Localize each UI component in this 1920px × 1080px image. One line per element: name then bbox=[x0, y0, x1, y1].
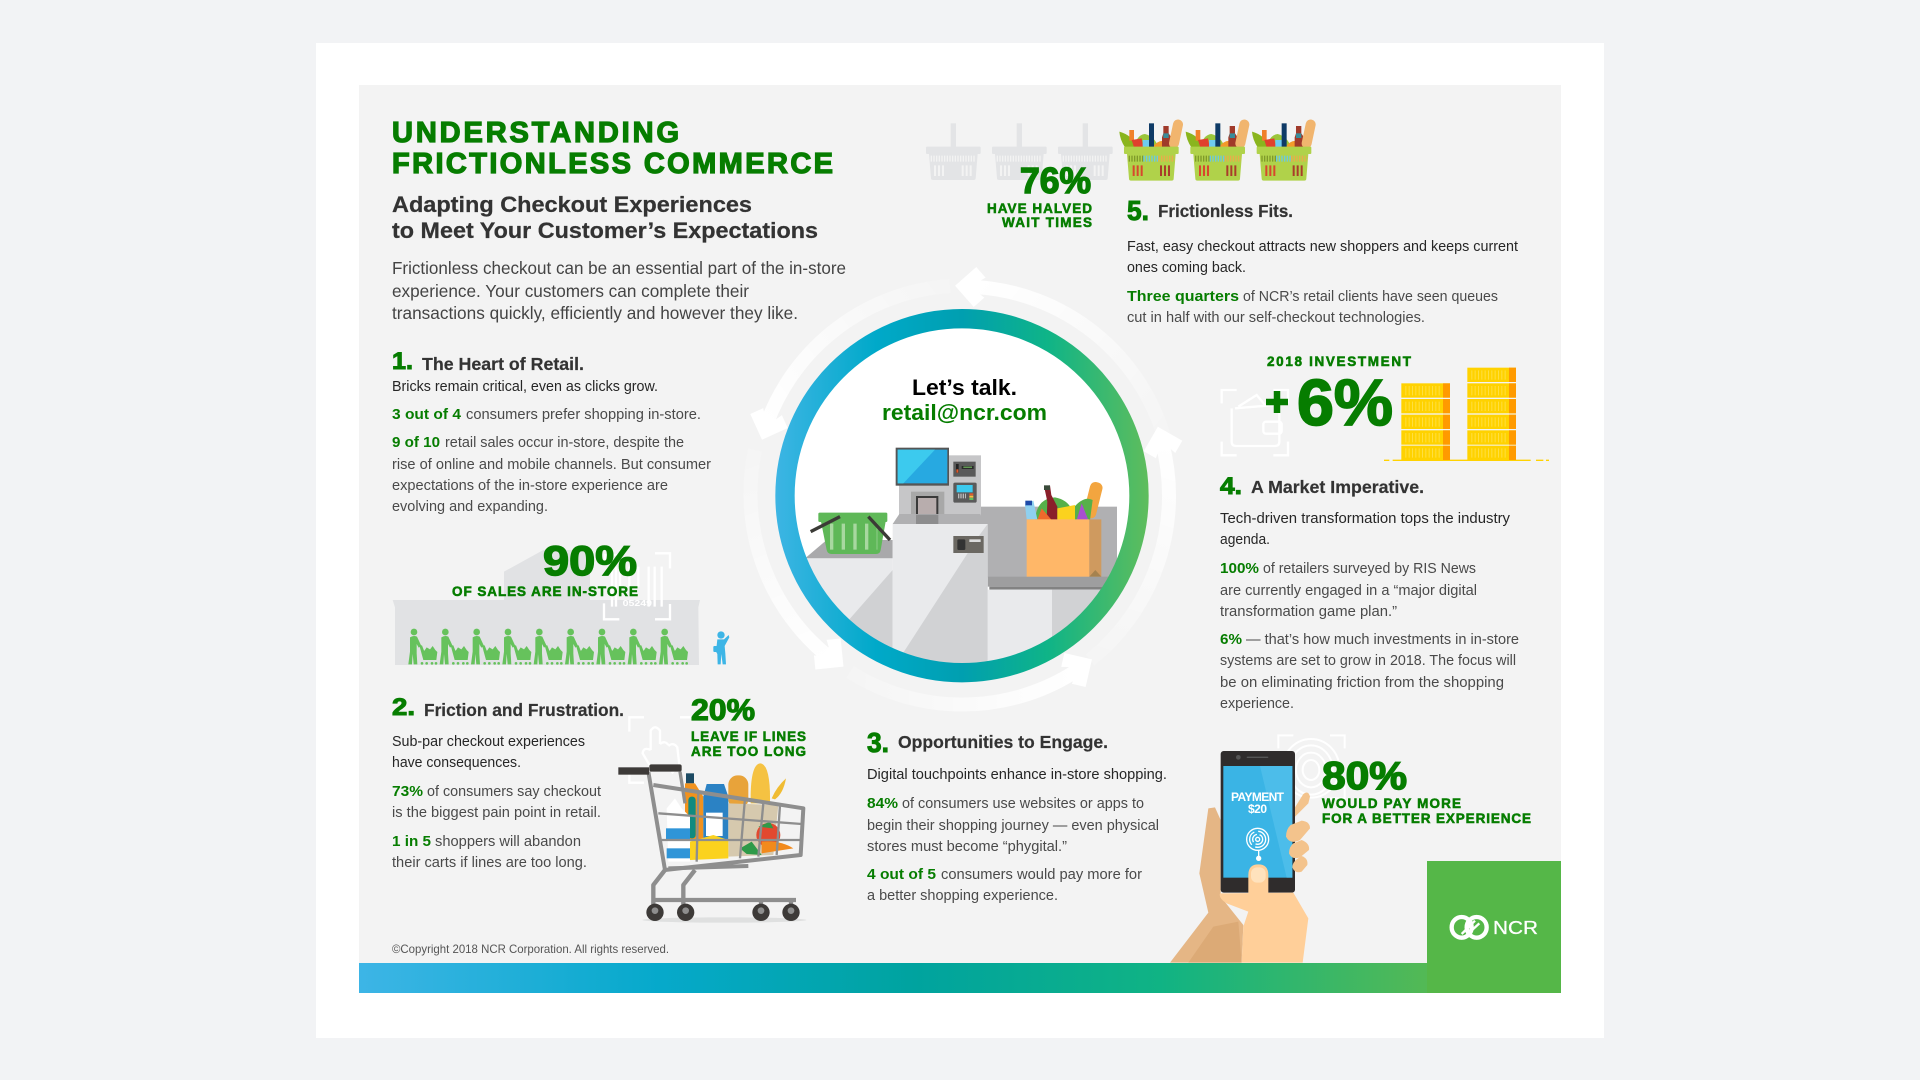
section 2 body: of consumers say checkout bbox=[427, 784, 601, 800]
kiosk body bbox=[892, 455, 988, 663]
barcode number: 05249 bbox=[623, 599, 653, 608]
section 1 heading bbox=[392, 348, 584, 375]
cart handle bbox=[618, 764, 682, 775]
icon: interlocked rings bbox=[1452, 917, 1487, 938]
shopping cart bbox=[618, 763, 806, 923]
plus six percent: 6% bbox=[1297, 366, 1393, 439]
section 2 body: is the biggest pain point in retail. bbox=[392, 805, 601, 821]
scanner bbox=[911, 492, 944, 524]
section 2 heading: Friction and Frustration. bbox=[424, 700, 624, 720]
receipt printer bbox=[953, 462, 976, 477]
gradient ring bbox=[785, 319, 1139, 673]
section 5: frictionless fits bbox=[1127, 195, 1518, 326]
20 percent stat: LEAVE IF LINES bbox=[691, 729, 806, 744]
section 4 body: be on eliminating friction from the shopping bbox=[1220, 675, 1504, 691]
intro paragraph bbox=[392, 258, 846, 323]
section 3 body: begin their shopping journey — even physical bbox=[867, 818, 1159, 834]
section 2 body: shoppers will abandon bbox=[435, 834, 581, 850]
section 1 body: 9 of 10 bbox=[392, 435, 440, 451]
section 5 heading: 5. bbox=[1127, 195, 1149, 226]
section 4 body: experience. bbox=[1220, 696, 1294, 712]
green square bbox=[1427, 861, 1561, 993]
right counter bbox=[981, 506, 1117, 661]
payment text: $20 bbox=[1248, 802, 1267, 816]
76 percent stat: WAIT TIMES bbox=[1002, 215, 1092, 230]
section 3 heading: 3. bbox=[867, 727, 889, 758]
section 2 body: 1 in 5 bbox=[392, 834, 431, 850]
section 2 body: Sub-par checkout experiences bbox=[392, 734, 585, 750]
80 percent stat: WOULD PAY MORE bbox=[1322, 796, 1461, 811]
call to action: Let’s talk. bbox=[912, 375, 1017, 400]
copyright: ©Copyright 2018 NCR Corporation. All rights reserved. bbox=[392, 942, 669, 956]
90 percent stat bbox=[452, 537, 638, 599]
card reader bbox=[953, 483, 977, 503]
gradient footer bar bbox=[359, 963, 1427, 993]
icon: barcode bbox=[604, 553, 670, 619]
section 1: the heart of retail bbox=[392, 348, 711, 515]
NCR logo block bbox=[1427, 861, 1561, 993]
cart frame bbox=[648, 772, 803, 907]
section 4 body: systems are set to grow in 2018. The focus will bbox=[1220, 653, 1516, 669]
section 3 body bbox=[867, 767, 1167, 904]
section 4 body bbox=[1220, 511, 1519, 712]
section 1 body bbox=[392, 379, 711, 515]
payment slot bbox=[953, 536, 984, 553]
coin stacks bbox=[1384, 368, 1549, 460]
front fingers bbox=[1286, 821, 1310, 872]
investment graphic bbox=[1222, 354, 1549, 460]
cart groceries bbox=[666, 763, 793, 862]
section 5 body bbox=[1127, 239, 1518, 326]
call to action: retail@ncr.com bbox=[882, 400, 1047, 425]
section 3 heading: Opportunities to Engage. bbox=[898, 732, 1108, 752]
section 4 body: 6% bbox=[1220, 632, 1242, 648]
white disc bbox=[785, 319, 1139, 672]
phone bbox=[1221, 751, 1295, 893]
upper finger bbox=[1293, 792, 1310, 818]
section 4 body: agenda. bbox=[1220, 532, 1270, 548]
intro paragraph: Frictionless checkout can be an essential part of the in-store bbox=[392, 258, 846, 278]
white card bbox=[316, 43, 1604, 1038]
section 3 body: a better shopping experience. bbox=[867, 888, 1058, 904]
left counter bbox=[806, 540, 893, 648]
subtitle: Adapting Checkout Experiences bbox=[392, 192, 752, 217]
section 1 body: consumers prefer shopping in-store. bbox=[466, 407, 701, 423]
subtitle bbox=[392, 192, 818, 243]
section 3 body: Digital touchpoints enhance in-store shopping. bbox=[867, 767, 1167, 783]
payment text: PAYMENT bbox=[1231, 790, 1285, 804]
green basket bbox=[811, 513, 890, 554]
section 1 body: retail sales occur in-store, despite the bbox=[445, 435, 684, 451]
icon: phone fingerprint bbox=[1247, 828, 1269, 860]
section 5 body: cut in half with our self-checkout technologies. bbox=[1127, 310, 1425, 326]
section 3: opportunities to engage bbox=[867, 727, 1167, 904]
title bbox=[392, 117, 833, 180]
circular arrows bbox=[743, 266, 1185, 705]
90 percent stat: 90% bbox=[543, 537, 637, 584]
80 percent stat bbox=[1322, 755, 1531, 826]
80 percent stat: 80% bbox=[1322, 755, 1407, 798]
section 1 body: rise of online and mobile channels. But consumer bbox=[392, 457, 711, 473]
section 3 heading bbox=[867, 727, 1108, 758]
subtitle: to Meet Your Customer’s Expectations bbox=[392, 218, 818, 243]
basket row bbox=[926, 119, 1317, 181]
section 2 heading: 2. bbox=[392, 694, 415, 721]
checkout scene bbox=[806, 448, 1117, 663]
section 4 body: are currently engaged in a “major digital bbox=[1220, 583, 1477, 599]
section 2 body: their carts if lines are too long. bbox=[392, 855, 587, 871]
central circle bbox=[785, 319, 1139, 693]
palm and thumb bbox=[1220, 864, 1308, 963]
intro paragraph: transactions quickly, efficiently and however they like. bbox=[392, 303, 798, 323]
2018 investment label: 2018 INVESTMENT bbox=[1267, 354, 1412, 369]
section 5 heading: Frictionless Fits. bbox=[1158, 201, 1293, 221]
section 4 body: Tech-driven transformation tops the industry bbox=[1220, 511, 1511, 527]
icon: white pointer hand bbox=[629, 717, 694, 783]
full baskets bbox=[1119, 119, 1317, 181]
section 4 heading: 4. bbox=[1220, 473, 1242, 500]
icon: wallet bbox=[1222, 390, 1288, 455]
20 percent stat bbox=[691, 694, 806, 759]
section 5 body: of NCR’s retail clients have seen queues bbox=[1243, 289, 1498, 305]
hand back bbox=[1170, 807, 1243, 963]
section 4 body: of retailers surveyed by RIS News bbox=[1263, 561, 1476, 577]
store illustration with queue bbox=[393, 550, 729, 665]
section 5 body: ones coming back. bbox=[1127, 260, 1246, 276]
title: FRICTIONLESS COMMERCE bbox=[392, 148, 833, 180]
76 percent stat bbox=[987, 160, 1092, 230]
section 1 heading: The Heart of Retail. bbox=[422, 354, 584, 374]
section 4 body: — that’s how much investments in in-store bbox=[1246, 632, 1519, 648]
icon: fingerprint bbox=[1278, 735, 1345, 798]
section 4 heading bbox=[1220, 473, 1424, 500]
queue of shoppers bbox=[408, 629, 688, 665]
section 2: friction and frustration bbox=[392, 694, 624, 871]
section 4 body: 100% bbox=[1220, 561, 1259, 577]
phone payment illustration bbox=[1170, 735, 1345, 963]
section 5 heading bbox=[1127, 195, 1293, 226]
grocery bag bbox=[1025, 481, 1104, 577]
grey baskets bbox=[926, 123, 1113, 180]
20 percent stat: 20% bbox=[691, 694, 755, 727]
section 4: a market imperative bbox=[1220, 473, 1519, 712]
section 2 heading bbox=[392, 694, 624, 721]
section 3 body: 4 out of 5 bbox=[867, 867, 936, 883]
20 percent stat: ARE TOO LONG bbox=[691, 744, 806, 759]
store building bbox=[393, 550, 700, 665]
NCR wordmark: NCR bbox=[1493, 917, 1538, 938]
section 1 heading: 1. bbox=[392, 348, 413, 375]
section 1 body: 3 out of 4 bbox=[392, 407, 461, 423]
title: UNDERSTANDING bbox=[392, 117, 679, 149]
intro paragraph: experience. Your customers can complete their bbox=[392, 281, 749, 301]
76 percent stat: 76% bbox=[1020, 160, 1091, 201]
section 1 body: Bricks remain critical, even as clicks grow. bbox=[392, 379, 658, 395]
inner panel bbox=[359, 85, 1561, 993]
90 percent stat: OF SALES ARE IN-STORE bbox=[452, 584, 638, 599]
80 percent stat: FOR A BETTER EXPERIENCE bbox=[1322, 811, 1531, 826]
section 5 body: Three quarters bbox=[1127, 289, 1239, 305]
section 2 body: 73% bbox=[392, 784, 423, 800]
call to action bbox=[882, 375, 1047, 425]
section 2 body: have consequences. bbox=[392, 755, 521, 771]
section 1 body: expectations of the in-store experience are bbox=[392, 478, 668, 494]
section 3 body: consumers would pay more for bbox=[941, 867, 1142, 883]
section 4 body: transformation game plan.” bbox=[1220, 604, 1397, 620]
section 3 body: of consumers use websites or apps to bbox=[902, 796, 1144, 812]
section 1 body: evolving and expanding. bbox=[392, 499, 548, 515]
section 4 heading: A Market Imperative. bbox=[1251, 477, 1424, 497]
cart wheels bbox=[646, 904, 800, 921]
cart shadow bbox=[642, 917, 806, 923]
section 3 body: 84% bbox=[867, 796, 898, 812]
section 5 body: Fast, easy checkout attracts new shoppers and keeps current bbox=[1127, 239, 1518, 255]
thumbnail bbox=[1251, 867, 1266, 883]
header block bbox=[392, 117, 846, 323]
76 percent stat: HAVE HALVED bbox=[987, 201, 1092, 216]
section 3 body: stores must become “phygital.” bbox=[867, 839, 1067, 855]
icon: woman with phone bbox=[713, 631, 729, 664]
payment text bbox=[1231, 790, 1285, 816]
kiosk monitor bbox=[896, 448, 949, 486]
section 2 body bbox=[392, 734, 601, 871]
